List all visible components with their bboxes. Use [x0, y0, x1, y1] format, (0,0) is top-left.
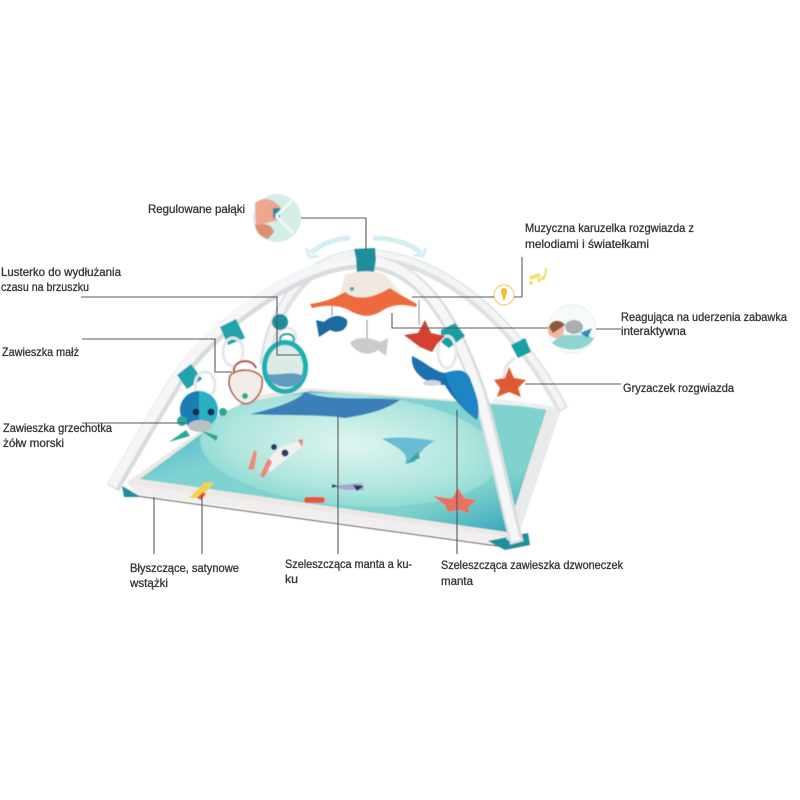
label: tummy-time mirror: czasu na brzuszku — [1, 280, 89, 294]
arch clips — [177, 248, 531, 389]
label: satin ribbons: wstążki — [129, 576, 168, 590]
label: starfish teether: Gryzaczek rozgwiazda — [623, 381, 734, 395]
label: manta bell pendant — [441, 558, 624, 588]
hanging stringed mirror — [262, 328, 308, 394]
icon: music light bulb — [494, 285, 514, 305]
icon: starfish mobile — [310, 271, 419, 340]
icon: orange star teether — [494, 367, 526, 397]
label: satin ribbons — [129, 561, 239, 590]
label: interactive toy — [621, 310, 787, 338]
front arch — [113, 262, 517, 543]
adjust arrows — [306, 238, 426, 257]
icon: turtle — [169, 391, 227, 442]
label: interactive toy: Reagująca na uderzenia zabawka — [621, 310, 787, 324]
icon: blue fish — [316, 316, 347, 337]
back arch — [265, 255, 563, 410]
label: musical mobile: Muzyczna karuzelka rozgwiazda z — [525, 221, 694, 235]
label: manta bell pendant: manta — [441, 574, 473, 588]
label: musical mobile — [525, 221, 694, 251]
label: tummy-time mirror: Lusterko do wydłużania — [1, 265, 121, 279]
label: crinkly manta — [285, 557, 412, 586]
label: crinkly manta: Szeleszcząca manta a ku- — [285, 557, 412, 571]
label: turtle rattle: żółw morski — [3, 436, 64, 450]
icon: red star — [404, 320, 445, 352]
hanging rings — [195, 336, 515, 398]
icon: shell — [229, 361, 262, 404]
label: turtle rattle — [3, 421, 112, 450]
label: tummy-time mirror — [1, 265, 121, 294]
label: satin ribbons: Błyszczące, satynowe — [130, 561, 239, 575]
label: interactive toy: interaktywna — [621, 324, 686, 338]
label: adjustable arches: Regulowane pałąki — [148, 202, 245, 216]
icon: manta hanging — [412, 356, 479, 420]
play gym illustration — [112, 238, 563, 550]
icon: interactive toy circle photo — [548, 305, 596, 353]
icon: silver fish — [350, 338, 388, 356]
label: turtle rattle: Zawieszka grzechotka — [3, 421, 112, 435]
label: shell pendant: Zawieszka małż — [2, 345, 79, 359]
callout lines — [81, 218, 621, 554]
icon: music notes — [529, 268, 547, 285]
mat — [122, 384, 557, 550]
label: crinkly manta: ku — [285, 572, 298, 586]
icon: adjustable arch circle photo — [253, 194, 301, 242]
mat prints — [250, 392, 400, 418]
label: manta bell pendant: Szeleszcząca zawieszka dzwoneczek — [441, 558, 624, 572]
label: musical mobile: melodiami i światełkami — [525, 237, 649, 251]
